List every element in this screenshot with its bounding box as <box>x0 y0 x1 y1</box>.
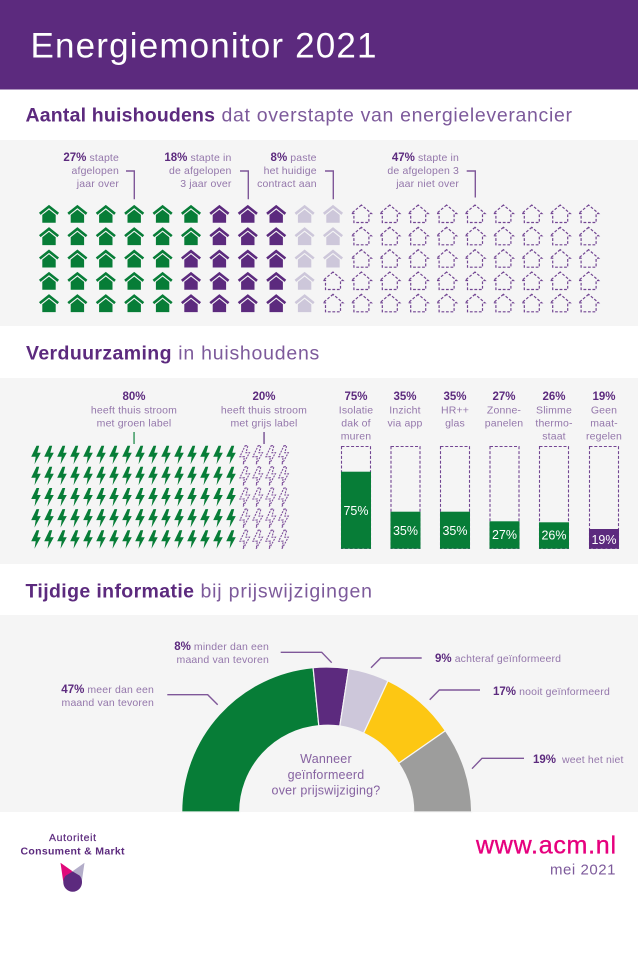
bar: inzicht 35%: via app <box>388 418 422 430</box>
label: 18%: 3 jaar over <box>180 178 232 190</box>
label: 20% grijs: 20% <box>252 391 276 403</box>
bar: slimme thermostaat 26%: 26% <box>541 528 567 542</box>
donut centre text: Wanneer <box>300 752 352 766</box>
donut chart <box>182 667 472 812</box>
bar: inzicht 35%: 35% <box>393 391 417 403</box>
label: 20% grijs: heeft thuis stroom <box>221 404 307 416</box>
label: 8%: contract aan <box>257 178 317 190</box>
bar: isolatie 75%: Isolatie <box>339 404 373 416</box>
house pictogram grid <box>40 205 599 312</box>
bar: slimme thermostaat 26%: Slimme <box>536 404 572 416</box>
callout: 8% <box>174 641 332 666</box>
lightning bolt pictogram grid <box>31 446 288 549</box>
website url: www.acm.nl <box>475 831 616 859</box>
callout: 9% <box>371 653 561 668</box>
label: 80% groen <box>91 391 177 444</box>
label: 47%: de afgelopen 3 <box>387 165 459 177</box>
callout: 8%: 8% minder dan een <box>174 641 269 653</box>
bar: zonnepanelen 27%: 27% <box>492 391 516 403</box>
label: 20% grijs: met grijs label <box>230 418 298 430</box>
segment: 19% <box>399 731 472 812</box>
label: 20% grijs <box>221 391 307 444</box>
bar: inzicht 35%: 35% <box>393 524 418 538</box>
segment: 47% <box>182 668 319 812</box>
segment: 17% <box>364 681 445 763</box>
bar: isolatie 75% <box>339 391 373 549</box>
logo: Autoriteit Consument & Markt <box>20 832 125 892</box>
bar: geen maatregelen 19% <box>586 391 622 549</box>
donut centre text: over prijswijziging? <box>272 784 380 798</box>
bar: geen maatregelen 19%: maat- <box>590 418 618 430</box>
icon: tulip mark <box>60 863 84 892</box>
bar: zonnepanelen 27%: 27% <box>492 528 517 542</box>
title: Energiemonitor 2021 <box>30 26 376 66</box>
label: 18%: de afgelopen <box>169 165 232 177</box>
bar: isolatie 75%: muren <box>341 430 371 442</box>
label: 27%: 27% stapte <box>63 152 119 164</box>
label: 8%: 8% paste <box>271 152 317 164</box>
bar: geen maatregelen 19%: regelen <box>586 430 622 442</box>
panel: overstappen <box>0 140 638 326</box>
bar: inzicht 35%: Inzicht <box>389 404 421 416</box>
bar: HR++ glas 35%: glas <box>445 418 465 430</box>
bar: inzicht 35% <box>388 391 422 549</box>
label: 27% <box>63 152 134 199</box>
donut centre text: geïnformeerd <box>288 768 364 782</box>
bar: zonnepanelen 27%: panelen <box>485 418 523 430</box>
bar: slimme thermostaat 26% <box>535 391 573 549</box>
callout: 17%: 17% nooit geïnformeerd <box>493 686 610 698</box>
donut centre text <box>272 752 380 798</box>
heading: tijdige informatie: Tijdige informatie <box>26 580 194 602</box>
panel: verduurzaming <box>0 378 638 564</box>
heading: verduurzaming: Verduurzaming <box>26 342 172 364</box>
heading: aantal huishoudens <box>26 105 572 127</box>
heading: verduurzaming: in huishoudens <box>178 342 320 364</box>
logo: Autoriteit Consument & Markt: Consument & Markt <box>20 846 125 858</box>
callout: 17% <box>430 686 610 700</box>
bar: geen maatregelen 19%: Geen <box>591 404 617 416</box>
label: 27%: jaar over <box>76 178 119 190</box>
bar: HR++ glas 35%: 35% <box>442 524 468 538</box>
label: 8% <box>257 152 333 199</box>
callout: 47% <box>61 684 218 709</box>
bar: isolatie 75%: 75% <box>343 504 369 518</box>
label: 18%: 18% stapte in <box>164 152 232 164</box>
bar: isolatie 75%: dak of <box>341 418 371 430</box>
date: mei 2021 <box>550 862 616 878</box>
callout: 19% <box>472 754 624 769</box>
header banner <box>0 0 638 90</box>
label: 80% groen: met groen label <box>97 418 171 430</box>
heading: tijdige informatie <box>26 580 372 602</box>
bar: slimme thermostaat 26%: staat <box>542 430 566 442</box>
panel: tijdige informatie <box>0 615 638 812</box>
label: 27%: afgelopen <box>72 165 119 177</box>
bar: zonnepanelen 27%: Zonne- <box>487 404 521 416</box>
callout: 8%: maand van tevoren <box>177 654 269 666</box>
heading: verduurzaming <box>26 342 320 364</box>
bar: HR++ glas 35% <box>440 391 470 549</box>
label: 18% <box>164 152 248 199</box>
callout: 9%: 9% achteraf geïnformeerd <box>435 653 561 665</box>
label: 80% groen: 80% <box>122 391 146 403</box>
callout: 19%: 19% weet het niet <box>533 754 624 766</box>
heading: aantal huishoudens: Aantal huishoudens <box>26 105 215 127</box>
heading: aantal huishoudens: dat overstapte van energieleverancier <box>222 105 572 127</box>
bar: slimme thermostaat 26%: thermo- <box>535 418 573 430</box>
logo: Autoriteit Consument & Markt: Autoriteit <box>49 832 96 844</box>
callout: 47%: 47% meer dan een <box>61 684 154 696</box>
bar: HR++ glas 35%: HR++ <box>441 404 469 416</box>
bar: geen maatregelen 19%: 19% <box>591 533 617 547</box>
label: 47%: jaar niet over <box>395 178 459 190</box>
label: 47%: 47% stapte in <box>392 152 459 164</box>
bar: slimme thermostaat 26%: 26% <box>542 391 566 403</box>
segment: 8% <box>313 667 349 726</box>
callout: 47%: maand van tevoren <box>62 697 154 709</box>
bar: isolatie 75%: 75% <box>344 391 368 403</box>
label: 8%: het huidige <box>264 165 317 177</box>
bar: geen maatregelen 19%: 19% <box>592 391 616 403</box>
label: 47% <box>387 152 475 198</box>
heading: tijdige informatie: bij prijswijzigingen <box>200 580 372 602</box>
bar: HR++ glas 35%: 35% <box>443 391 467 403</box>
bar: zonnepanelen 27% <box>485 391 523 549</box>
label: 80% groen: heeft thuis stroom <box>91 404 177 416</box>
segment: 9% <box>340 669 388 733</box>
